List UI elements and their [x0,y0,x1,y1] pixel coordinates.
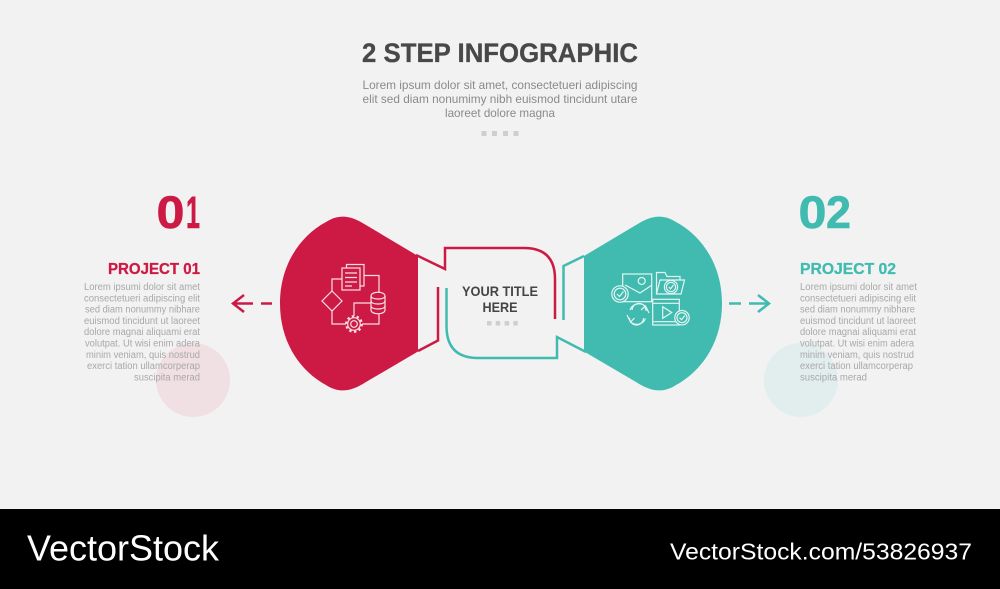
footer url: VectorStock.com/53826937 [670,538,972,564]
center title [462,283,538,315]
heading project 01: PROJECT 01 [108,261,200,278]
body text project 01: euismod tincidunt ut laoreet [84,316,200,327]
arrow: right [729,295,769,312]
body text project 02: exerci tation ullamcorperap [800,361,913,372]
outline: teal upper bracket [564,256,584,320]
number 01: 1 [186,187,200,238]
intro text: elit sed diam nonumimy nibh euismod tincidunt utare [362,92,638,106]
body text project 02: consectetueri adipiscing elit [800,293,916,304]
center dots [487,321,518,326]
decorative circle: left [156,343,230,417]
body text project 01: Lorem ipsumi dolor sit amet [84,282,200,293]
number 02: 2 [826,187,851,238]
shape: teal step [584,217,722,390]
number 01: 0 [156,187,184,238]
intro dots [482,131,518,136]
body text project 01 [84,282,200,383]
body text project 02: sed diam nonummy nibhare [800,305,915,316]
body text project 02: dolore magnai aliquami erat [800,327,916,338]
body text project 01: consectetueri adipiscing elit [84,293,200,304]
outline: red upper frame [416,248,555,319]
number 02: 0 [798,187,826,238]
body text project 02: volutpat. Ut wisi enim adera [800,338,914,350]
icon: workflow [322,264,385,332]
center title: YOUR TITLE [462,283,538,299]
shape: red step [280,217,418,390]
decorative circle: right [764,343,838,417]
body text project 02: euismod tincidunt ut laoreet [800,316,916,327]
body text project 01: exerci tation ullamcorperap [87,361,200,372]
footer bar [0,509,1000,589]
intro text: Lorem ipsum dolor sit amet, consectetueri adipiscing [362,78,638,92]
title: 2 STEP INFOGRAPHIC [362,38,638,68]
body text project 02: Lorem ipsumi dolor sit amet [800,282,917,293]
body text project 02 [800,282,917,383]
heading project 02: PROJECT 02 [800,261,896,278]
intro text: laoreet dolore magna [445,106,555,120]
center title: HERE [482,299,518,315]
intro text [362,78,638,120]
arrow: left [233,295,272,312]
outline: red lower bracket [418,287,438,351]
panel: project 01 text [84,187,200,383]
body text project 01: minim veniam, quis nostrud [86,350,200,361]
body text project 01: dolore magnai aliquami erat [84,327,200,338]
panel: project 02 text [798,187,917,383]
body text project 02: minim veniam, quis nostrud [800,350,914,361]
footer brand: VectorStock [27,528,220,568]
body text project 02: suscipita merad [800,372,867,383]
body text project 01: sed diam nonummy nibhare [85,305,200,316]
body text project 01: suscipita merad [134,372,200,383]
icon: media and files [612,272,689,325]
outline: teal lower frame [446,288,586,358]
body text project 01: volutpat. Ut wisi enim adera [85,338,200,350]
